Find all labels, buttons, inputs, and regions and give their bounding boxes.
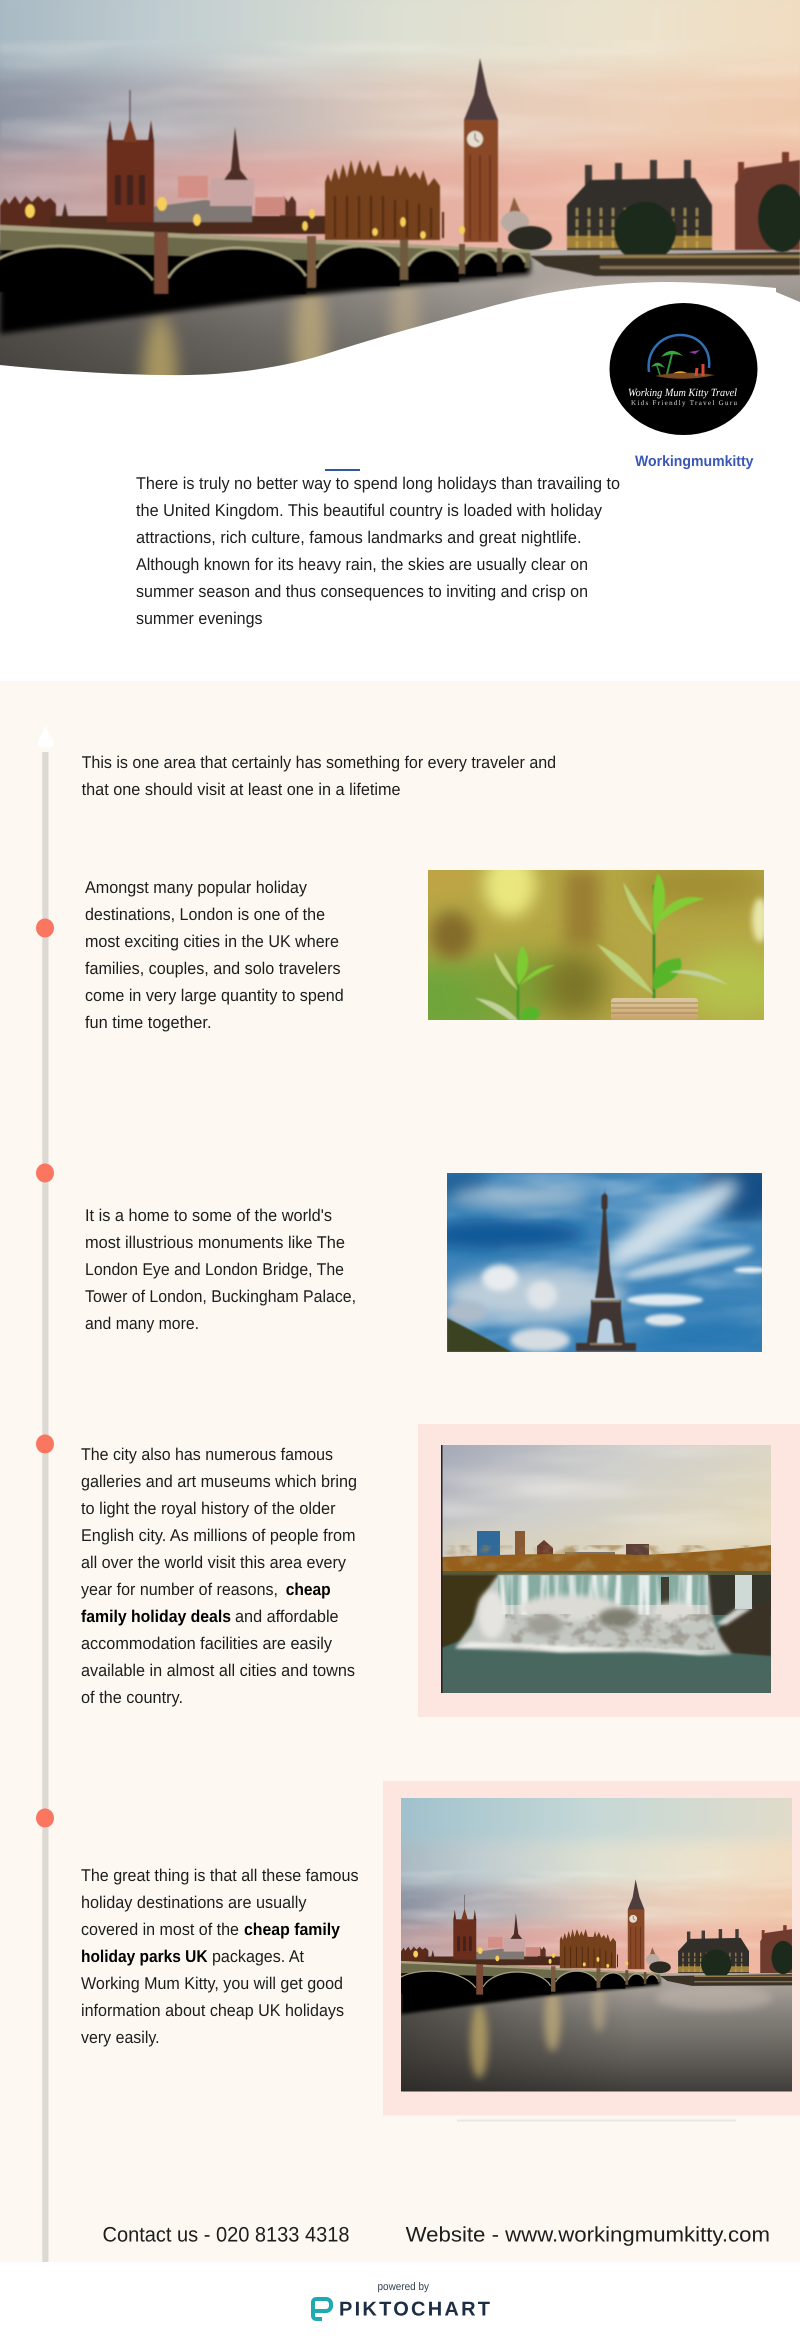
accent dash [325, 469, 360, 471]
text: popular destinations: come in very large quantity to spend [85, 986, 344, 1005]
timeline dot 4 [36, 1808, 54, 1828]
text: galleries and museums: all over the world visit this area every [81, 1553, 346, 1572]
divider under photo [457, 2120, 736, 2122]
text: galleries and museums: galleries and art museums which bring [81, 1472, 357, 1491]
text: galleries and museums: to light the royal history of the older [81, 1499, 336, 1518]
intro text block: the United Kingdom. This beautiful country is loaded with holiday [136, 501, 602, 520]
lead paragraph [82, 753, 556, 799]
text: popular destinations: destinations, London is one of the [85, 905, 325, 924]
lead paragraph: that one should visit at least one in a lifetime [82, 780, 401, 799]
text: popular destinations: most exciting cities in the UK where [85, 932, 339, 951]
contact phone: Contact us - 020 8133 4318 [102, 2224, 350, 2246]
text: monuments: London Eye and London Bridge, The [85, 1260, 344, 1279]
wave shape [0, 282, 800, 378]
text: galleries and museums: available in almost all cities and towns [81, 1661, 355, 1680]
footer branding [313, 2281, 490, 2321]
photo: London at dusk [401, 1798, 792, 2092]
photo: seedlings on coins [350, 853, 790, 1040]
text: holiday parks: very easily. [81, 2028, 160, 2047]
text: galleries and museums: year for number of reasons, [81, 1580, 278, 1599]
photo: waterfall [441, 1445, 771, 1693]
text: galleries and museums: of the country. [81, 1688, 183, 1707]
text: holiday parks: covered in most of the [81, 1920, 239, 1939]
header photo: London skyline with wave [0, 0, 800, 492]
text: galleries and museums: The city also has numerous famous [81, 1445, 333, 1464]
text: popular destinations [85, 878, 344, 1032]
intro text block: attractions, rich culture, famous landmarks and great nightlife. [136, 528, 582, 547]
text: holiday parks [81, 1866, 358, 2047]
pink frame with waterfall photo [418, 1424, 800, 1717]
text: holiday parks: information about cheap UK holidays [81, 2001, 344, 2020]
text: monuments: Tower of London, Buckingham Palace, [85, 1287, 356, 1306]
cream content panel [0, 681, 800, 2262]
intro text block: summer evenings [136, 609, 262, 628]
powered by label: powered by [378, 2281, 429, 2293]
text: holiday parks: cheap family [244, 1920, 340, 1939]
text: popular destinations: families, couples, and solo travelers [85, 959, 341, 978]
lead paragraph: This is one area that certainly has something for every traveler and [82, 753, 556, 772]
text: galleries and museums: and affordable [235, 1607, 339, 1626]
timeline dot 3 [36, 1434, 54, 1454]
text: popular destinations: Amongst many popular holiday [85, 878, 307, 897]
text: galleries and museums [81, 1445, 357, 1707]
text: holiday parks: The great thing is that all these famous [81, 1866, 358, 1885]
intro text block: Although known for its heavy rain, the skies are usually clear on [136, 555, 588, 574]
brand name: Workingmumkitty [635, 453, 754, 470]
timeline dot 1 [36, 918, 54, 938]
icon: piktochart logo [313, 2299, 331, 2319]
timeline [36, 725, 54, 2262]
text: holiday parks: holiday destinations are usually [81, 1893, 307, 1912]
text: holiday parks: packages. At [212, 1947, 304, 1966]
logo tagline: Kids Friendly Travel Guru [631, 399, 738, 407]
text: popular destinations: fun time together. [85, 1013, 212, 1032]
text: monuments: most illustrious monuments like The [85, 1233, 345, 1252]
text: holiday parks: holiday parks UK [81, 1947, 208, 1966]
text: monuments: It is a home to some of the world's [85, 1206, 332, 1225]
intro text block [136, 474, 620, 628]
text: galleries and museums: accommodation facilities are easily [81, 1634, 332, 1653]
timeline rail [42, 752, 48, 2262]
logo icon: arc, palms and sun [649, 335, 715, 379]
text: monuments: and many more. [85, 1314, 199, 1333]
pink frame with London photo [362, 1768, 800, 2116]
text: galleries and museums: English city. As millions of people from [81, 1526, 356, 1545]
text: galleries and museums: family holiday deals [81, 1607, 231, 1626]
text: galleries and museums: cheap [286, 1580, 331, 1599]
text: monuments [85, 1206, 356, 1333]
text: holiday parks: Working Mum Kitty, you will get good [81, 1974, 343, 1993]
logo wordmark: Working Mum Kitty Travel [628, 387, 737, 399]
timeline dot 2 [36, 1164, 54, 1182]
logo badge [610, 303, 758, 435]
intro text block: There is truly no better way to spend long holidays than travailing to [136, 474, 620, 493]
wordmark: PIKTOCHART [339, 2299, 490, 2321]
timeline top pendant [38, 725, 54, 748]
photo: Eiffel Tower [415, 1160, 790, 1359]
contact website: Website - www.workingmumkitty.com [406, 2224, 770, 2246]
intro text block: summer season and thus consequences to inviting and crisp on [136, 582, 588, 601]
